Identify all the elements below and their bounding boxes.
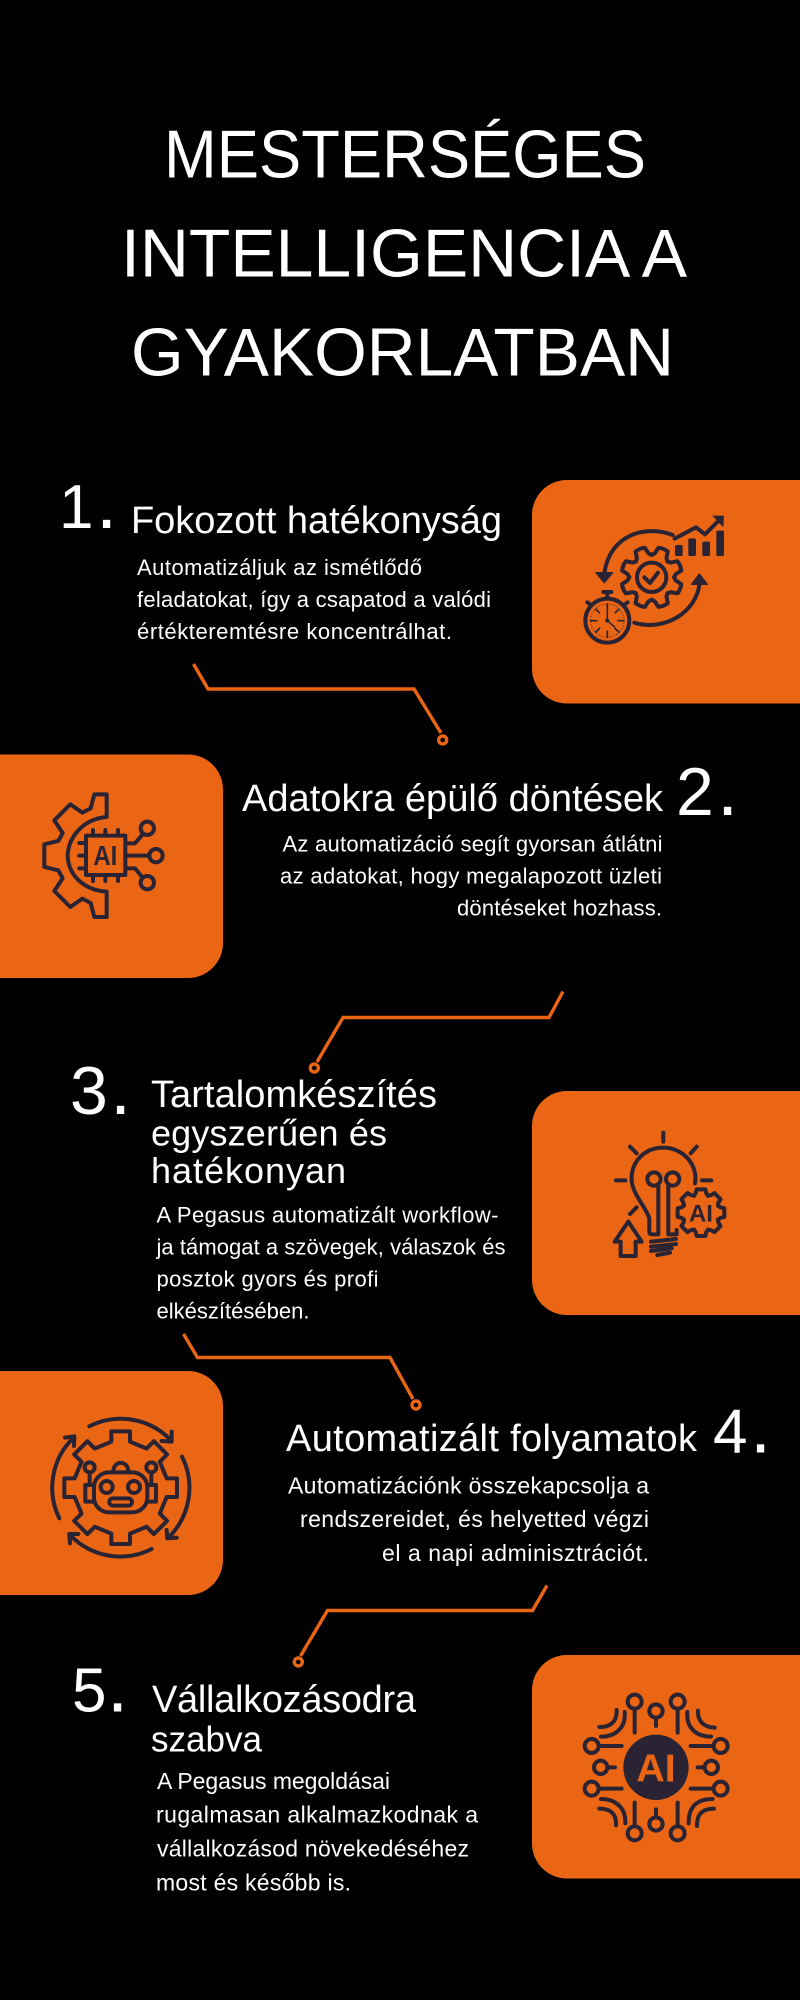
step 3 body text: [156, 1202, 506, 1324]
step 2 body text: az adatokat, hogy megalapozott üzleti: [280, 864, 662, 888]
step 4 orange panel: [0, 1371, 223, 1595]
step 4 number: .: [750, 1384, 771, 1470]
step 1 orange panel: [532, 480, 800, 704]
step 3 number: 3: [70, 1053, 108, 1129]
title: GYAKORLATBAN: [131, 314, 674, 390]
step 2 body text: döntéseket hozhass.: [457, 896, 662, 920]
step 2 number: .: [717, 747, 738, 832]
step 2 orange panel: [0, 754, 223, 978]
step 4 body text: [288, 1472, 649, 1566]
step 4 body text: el a napi adminisztrációt.: [382, 1540, 649, 1566]
step 3 orange panel: [532, 1091, 800, 1315]
icon: half gear with AI chip: [44, 794, 163, 917]
step 3: [70, 1046, 800, 1409]
icon: robot in gear with rotating arrows: [52, 1419, 189, 1557]
step 3 number: .: [110, 1046, 131, 1131]
step 3 body text: A Pegasus automatizált workflow-: [156, 1202, 498, 1228]
step 5 heading: Vállalkozásodra: [152, 1679, 417, 1721]
step 5 heading: [151, 1679, 417, 1760]
connector 1: [194, 664, 447, 744]
step 2 body text: Az automatizáció segít gyorsan átlátni: [282, 832, 662, 856]
step 3 body text: posztok gyors és profi: [156, 1266, 378, 1292]
step 1 body text: [137, 555, 491, 644]
icon: half gear with AI chip: AI: [93, 840, 117, 871]
step 1 body text: értékteremtésre koncentrálhat.: [137, 619, 452, 644]
step 5 body text: rugalmasan alkalmazkodnak a: [156, 1802, 478, 1828]
step 3 body text: elkészítésében.: [156, 1298, 310, 1324]
step 5 orange panel: [532, 1655, 800, 1878]
step 1 number: 1: [59, 473, 93, 542]
step 5 heading: szabva: [151, 1718, 263, 1760]
step 2: [0, 747, 738, 1072]
step 3 heading: hatékonyan: [151, 1150, 346, 1191]
step 2 number: 2: [676, 754, 714, 830]
step 5 number: .: [107, 1644, 128, 1728]
step 2 body text: [280, 832, 662, 920]
step 5 body text: A Pegasus megoldásai: [157, 1768, 390, 1794]
step 3 heading: egyszerűen és: [151, 1112, 387, 1154]
step 4 number: 4: [713, 1398, 747, 1466]
step 4: [0, 1371, 771, 1666]
step 4 body text: Automatizációnk összekapcsolja a: [288, 1472, 649, 1498]
step 5: [72, 1644, 800, 1896]
step 5 body text: [156, 1768, 478, 1896]
connector 3: [184, 1334, 420, 1409]
step 1 body text: feladatokat, így a csapatod a valódi: [137, 587, 491, 612]
title: INTELLIGENCIA A: [121, 216, 688, 292]
step 5 body text: vállalkozásod növekedéséhez: [157, 1836, 469, 1862]
icon: AI circuit node: [585, 1695, 728, 1840]
step 2 heading: Adatokra épülő döntések: [242, 778, 664, 820]
step 1: [59, 460, 800, 744]
step 3 heading: Tartalomkészítés: [151, 1074, 437, 1116]
title: MESTERSÉGES: [164, 116, 646, 192]
connector 4: [294, 1586, 547, 1666]
step 3 heading: [151, 1074, 437, 1191]
icon: gear with stopwatch and growth chart: [585, 516, 724, 643]
step 5 number: 5: [72, 1656, 106, 1726]
step 3 body text: ja támogat a szövegek, válaszok és: [156, 1234, 506, 1260]
title: [121, 116, 688, 390]
step 1 number: .: [96, 460, 117, 545]
step 4 body text: rendszereidet, és helyetted végzi: [300, 1506, 649, 1532]
icon: light bulb with AI gear and up arrow: [615, 1133, 724, 1256]
step 4 heading: Automatizált folyamatok: [286, 1418, 698, 1460]
step 1 heading: Fokozott hatékonyság: [131, 500, 502, 542]
icon: AI circuit node: AI: [636, 1747, 676, 1791]
icon: light bulb with AI gear and up arrow: AI: [689, 1201, 713, 1228]
connector 2: [310, 992, 563, 1072]
step 5 body text: most és később is.: [156, 1870, 351, 1896]
step 1 body text: Automatizáljuk az ismétlődő: [137, 555, 422, 580]
